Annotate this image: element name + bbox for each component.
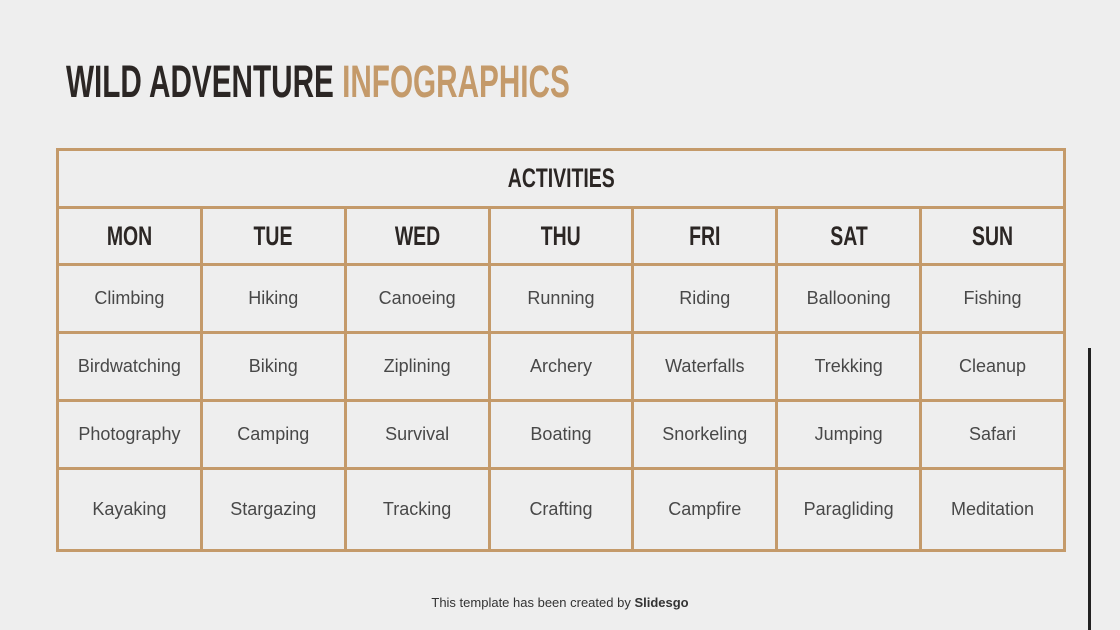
activities table: MON — [107, 220, 152, 250]
activities table: Riding — [679, 288, 730, 308]
activities table: Camping — [237, 424, 309, 444]
title: WILD ADVENTURE INFOGRAPHICS — [66, 56, 570, 107]
activities table: Photography — [78, 424, 180, 444]
activities table: Snorkeling — [662, 424, 747, 444]
activities table: Kayaking — [92, 499, 166, 519]
activities table: SUN — [972, 220, 1013, 250]
decorative vertical bar — [1088, 348, 1091, 630]
footer credit: This template has been created by Slidesgo — [431, 595, 689, 610]
activities table: ACTIVITIES — [508, 163, 614, 193]
activities table: Climbing — [94, 288, 164, 308]
activities table: Ballooning — [807, 288, 891, 308]
activities table: Jumping — [815, 424, 883, 444]
activities table: Survival — [385, 424, 449, 444]
activities table: Stargazing — [230, 499, 316, 519]
activities table: SAT — [830, 220, 867, 250]
activities table: Tracking — [383, 499, 451, 519]
activities table — [56, 148, 1066, 552]
activities table: Meditation — [951, 499, 1034, 519]
activities table: Fishing — [964, 288, 1022, 308]
activities table: Safari — [969, 424, 1016, 444]
activities table: Campfire — [668, 499, 741, 519]
activities table: Trekking — [814, 356, 883, 376]
activities table: Paragliding — [804, 499, 894, 519]
activities table: Cleanup — [959, 356, 1026, 376]
activities table: WED — [394, 220, 440, 250]
activities table: FRI — [689, 220, 720, 250]
activities table: Biking — [249, 356, 298, 376]
activities table: Birdwatching — [78, 356, 181, 376]
activities table: Archery — [530, 356, 592, 376]
activities table: TUE — [254, 220, 293, 250]
activities table: Crafting — [529, 499, 592, 519]
activities table: THU — [541, 220, 581, 250]
activities table: Ziplining — [384, 356, 451, 376]
activities table: Waterfalls — [665, 356, 744, 376]
activities table: Running — [527, 288, 594, 308]
activities table: Hiking — [248, 288, 298, 308]
activities table: Canoeing — [379, 288, 456, 308]
activities table: Boating — [530, 424, 591, 444]
